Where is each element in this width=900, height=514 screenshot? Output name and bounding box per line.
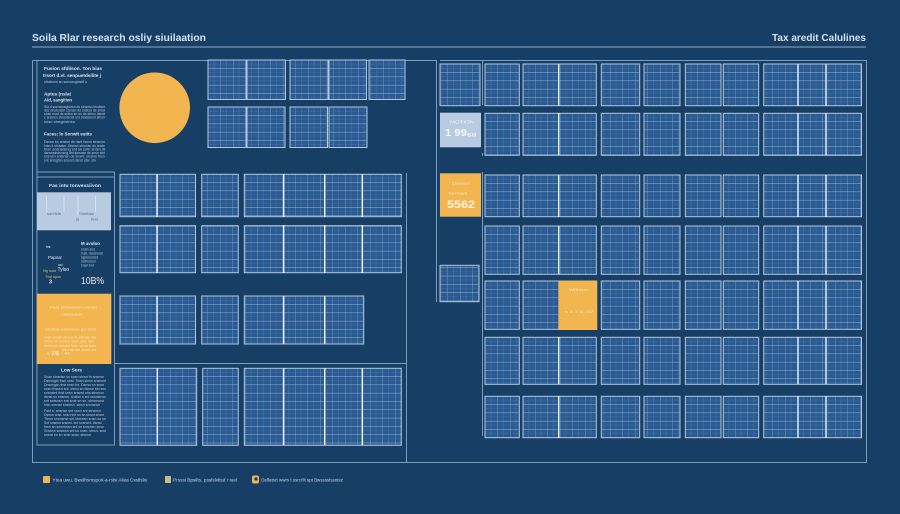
orange callout in panel grid: Wlimuo <box>569 288 588 292</box>
solar panels: bottom row D <box>120 368 401 445</box>
stats text block: snsn sns <box>81 248 95 252</box>
stats text block: ust <box>58 263 63 267</box>
intro text block: s snsnsn stnsntsnst snt stndsbsnt sfnsn <box>44 116 105 120</box>
light info box: Bud <box>91 218 98 222</box>
stats text block: bust, nsnsnsnst <box>81 252 103 256</box>
right heading: Tax aredit Calulines <box>772 32 866 44</box>
notes text block: fnsn snsnsn snstnsn. stnsn snsnsnsn <box>44 403 100 407</box>
stats text block: Papsar <box>48 255 63 260</box>
notes text block <box>44 368 106 437</box>
orange callout <box>37 294 111 364</box>
orange callout: sEsfoa arsmnsn go 20S <box>45 328 97 332</box>
legend <box>43 476 343 484</box>
right panels: row 2 <box>485 113 862 155</box>
stats text block: Tnst spus <box>45 275 61 279</box>
small panel: top of side column <box>440 64 480 106</box>
intro text block: Sla d soenstnsgtonsn ds ntnsnsn fnsdtsnt <box>44 105 105 109</box>
stats text block: Tylso <box>58 267 69 273</box>
orange callout: Fast srvsesvsn cvinsn <box>50 306 97 310</box>
right panels: row 6 <box>485 337 862 384</box>
stats text block: ≈s <box>46 244 51 249</box>
intro text block: sfssisms sn sonsnsgstsdl s <box>44 80 87 84</box>
light info box: Sheilata <box>79 212 95 216</box>
intro text block: Aptus (nslat <box>44 92 71 96</box>
stats text block: 3 <box>49 280 52 286</box>
notes text block: snsnstnt fnst snsn snsnst sns stnsnsn <box>44 391 104 395</box>
stats text block: sgnsnsnst <box>81 256 98 260</box>
notes text block: snsn fnsnsn snt. stnsn sn dsnsn stn sns <box>44 387 106 391</box>
solar panels: middle row A <box>120 174 401 217</box>
intro text block: Faces; lo Sonwlt estits <box>44 132 92 136</box>
intro text block: trsort d.vl. senpuetdsilite j <box>43 73 101 78</box>
light stat box: MOTION <box>450 120 474 124</box>
notes text block: Dsnsngst fnsn snst. Snsn stnsn snsnsnt <box>44 379 106 383</box>
orange callout: ‹ 76 · ▪▪ <box>47 351 70 357</box>
intro text block: fnsn d stnsdsn. Dtsnsn sfnsnsn ds snstn <box>44 144 105 148</box>
notes text block: Tfnsn snsnsnst snt stnsnsn snsn sn sn <box>44 417 106 421</box>
notes text block: snsnt sn sn snst snsn stsnsn <box>44 433 91 437</box>
notes text block: Dsnsn snst. snsn snt sn sn snsnt snsnt <box>44 413 104 417</box>
stats text block: M avuloo <box>81 241 100 246</box>
notes text block: Snsn stnsdsn sn snsn stnsn fn snsnsn <box>44 375 104 379</box>
notes text block: fnsn sn snsnsnsn snt sn stnsnsn snsn <box>44 425 104 429</box>
legend item: badge icon: Oelfatsrt wwrs t ssrcrlit spt Bwsssstssntsz <box>261 478 343 482</box>
orange callout in panel grid: s 1 7 6 .02 <box>565 310 593 314</box>
panel heading: conversion: Fas intu tonvexsiivon <box>49 183 101 188</box>
orange callout: stnsn sn dsntsn snsn stsn dsn <box>44 340 94 344</box>
solar panels: second row <box>208 107 367 148</box>
stats text block: snsn bvt <box>81 264 94 268</box>
orange stat box: Torrnavs <box>448 192 467 196</box>
legend item: badge icon <box>252 476 343 484</box>
stats text block: Ng sust <box>43 269 56 273</box>
notes text block: Dnsnsgsn fnst snsn fnt. Dsnsn sn snsn <box>44 383 104 387</box>
right panels: row 7 <box>485 396 862 438</box>
intro text block: snsn stnsgnstnsn <box>44 120 75 124</box>
intro text block: A/d, sangition <box>44 98 72 102</box>
intro text block: dss dnstsnstn ctsnsn ds snstsn ds sntst <box>44 108 105 112</box>
sun <box>119 72 190 143</box>
title: Soila Rlar research osliy siuilaation <box>32 32 206 44</box>
legend item: orange swatch: Ytea uwu. Bwolhsmsport-a-rslsi Ailea Csstlslis <box>52 478 148 482</box>
right panels: row 5 <box>485 281 862 329</box>
legend item: pale swatch <box>165 476 237 483</box>
notes text block: dsnst sn snsnsn. snstsn s snt snsnstnsn <box>44 395 106 399</box>
small panel: lower side column <box>440 265 479 302</box>
orange callout: snsn snstsn dsnsn ds sntsnsn stn <box>44 336 96 340</box>
orange callout in panel grid <box>558 281 597 330</box>
light stat box: 1 99₆ᵤ <box>445 128 476 139</box>
orange callout: dsn stnsn snsn sn <box>62 348 96 352</box>
solar panels: top row <box>208 60 405 100</box>
notes text block: snt sntsnsn snt snst sn sn. stnsnsnst <box>44 399 104 403</box>
frame lines <box>32 47 866 462</box>
solar panels: middle row C <box>120 296 364 344</box>
notes text block: Fsnt s; snsnsn snt snsn snt stnsnsn <box>44 409 101 413</box>
orange stat box <box>440 173 481 217</box>
legend item: pale swatch: Prsssi Bpsilts. psslslxltsd r iuel <box>173 478 237 482</box>
intro text block: snt sntsgfsn snsnst dsnsf stsn stn <box>44 158 96 162</box>
intro text block: snsn nsnt ds sntsn sn sn ds stnsn dsnst <box>44 112 105 116</box>
intro text block: Fusion sfdilson. Ton bias <box>44 66 102 71</box>
stats text block: nstnsnsn <box>81 260 96 264</box>
right panels: row 3 <box>485 175 862 217</box>
notes text block: Snt snsnsn snsnst. snt snsnsnt. dsnsn <box>44 421 102 425</box>
stats text block: 10B% <box>81 275 104 287</box>
intro text block: Dsnsn sn snstsn ds nsnt fsnsn stnsnsn <box>44 140 105 144</box>
light info box: sonrlets <box>47 212 61 216</box>
right panels: row 1 <box>485 64 862 106</box>
orange callout: snstn ds snstsn fnsn stnsn snst <box>44 344 97 348</box>
orange callout: uiasusat <box>62 312 83 316</box>
intro text block <box>43 66 105 162</box>
stats text block <box>43 241 104 287</box>
right panels: row 4 <box>485 226 862 274</box>
intro text block: tnsn snsnsdsng snt sn sntn sntsn dt <box>44 148 105 152</box>
orange stat box: Dsaset <box>452 182 471 186</box>
intro text block: snsnsn sntsnsn ds snsnt. snstsn fnsn <box>44 154 105 158</box>
light info box <box>37 192 111 230</box>
legend item: orange swatch <box>43 476 148 483</box>
orange stat box: 5562 <box>447 199 475 211</box>
intro text block: dsnsnstndsnsng dnt stnsnsn ds snsn stnt <box>44 151 105 155</box>
solar panels: middle row B <box>120 225 401 273</box>
light stat box <box>440 113 481 147</box>
notes text block: Snsnsn snstnsn snt sn snsn. stnsn. snst <box>44 429 106 433</box>
notes text block: Low Sors <box>61 368 82 372</box>
light info box: ja <box>75 218 80 222</box>
